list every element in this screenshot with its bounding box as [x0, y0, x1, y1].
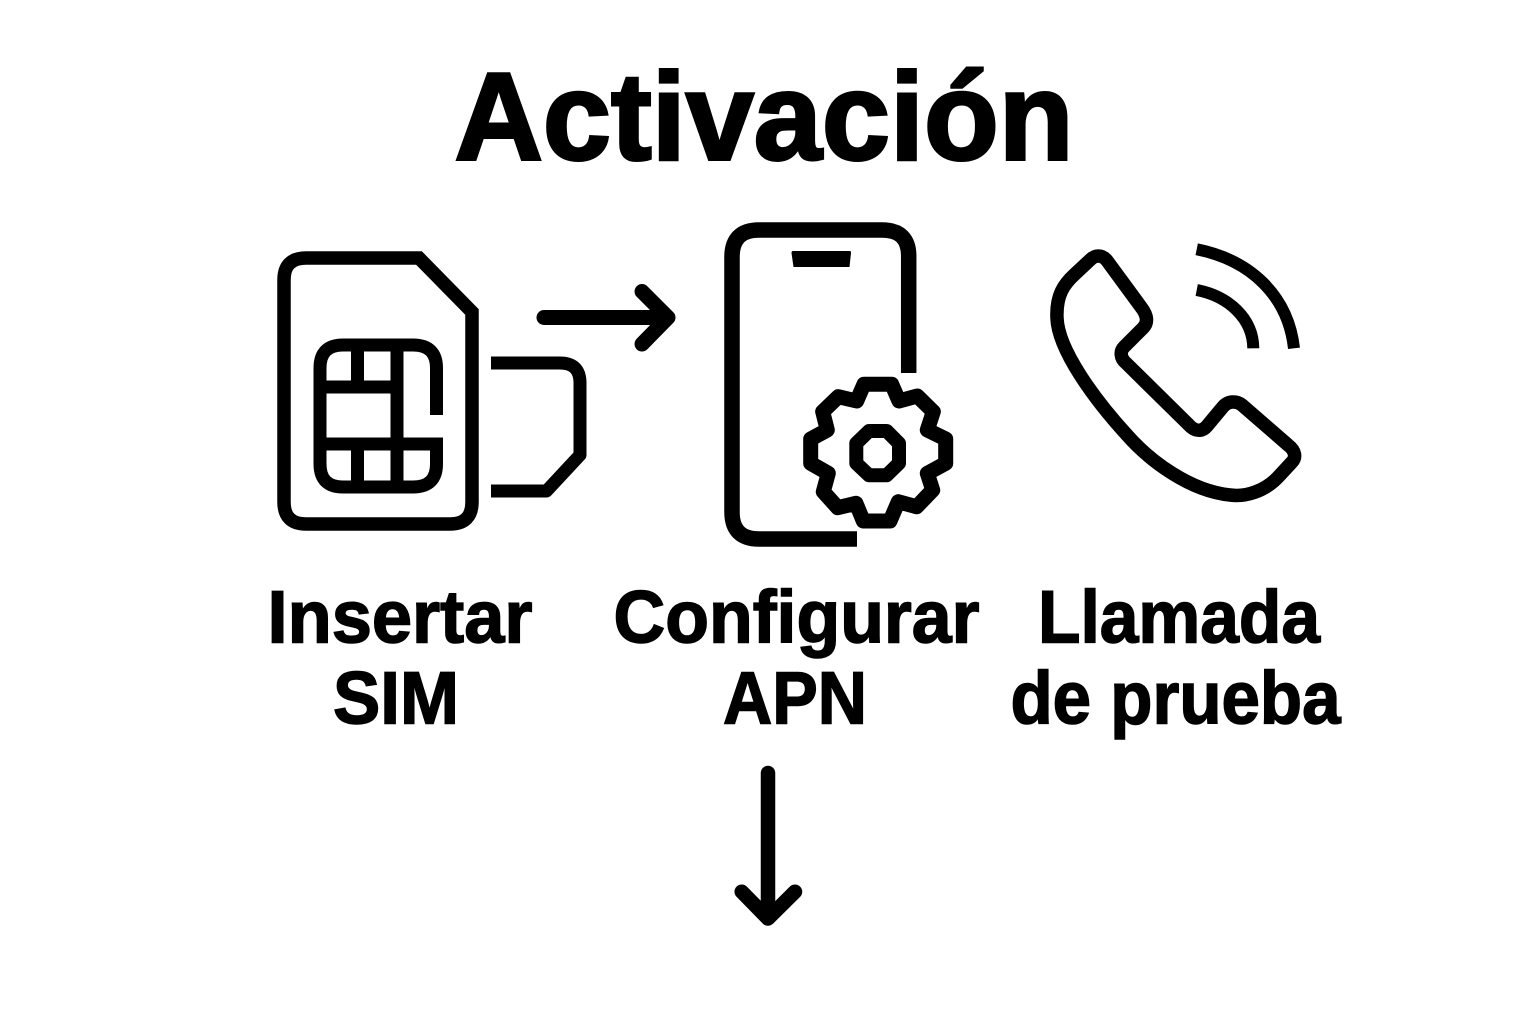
label: Configurar APN	[614, 576, 980, 740]
label: Insertar SIM: Insertar	[268, 576, 532, 658]
label: Configurar APN: APN	[723, 656, 867, 740]
label: Llamada de prueba: de prueba	[1010, 656, 1341, 740]
title: Activación	[454, 48, 1074, 186]
label: Insertar SIM: SIM	[333, 656, 459, 740]
icon: telephone handset	[1057, 249, 1295, 495]
icon: SIM card	[284, 258, 580, 524]
arrow: down	[742, 773, 795, 918]
icon: phone with gear	[732, 230, 946, 539]
label: Insertar SIM	[268, 576, 532, 740]
label: Llamada de prueba	[1010, 576, 1341, 740]
arrow: right	[544, 292, 668, 344]
label: Configurar APN: Configurar	[614, 576, 980, 658]
label: Llamada de prueba: Llamada	[1038, 576, 1321, 658]
